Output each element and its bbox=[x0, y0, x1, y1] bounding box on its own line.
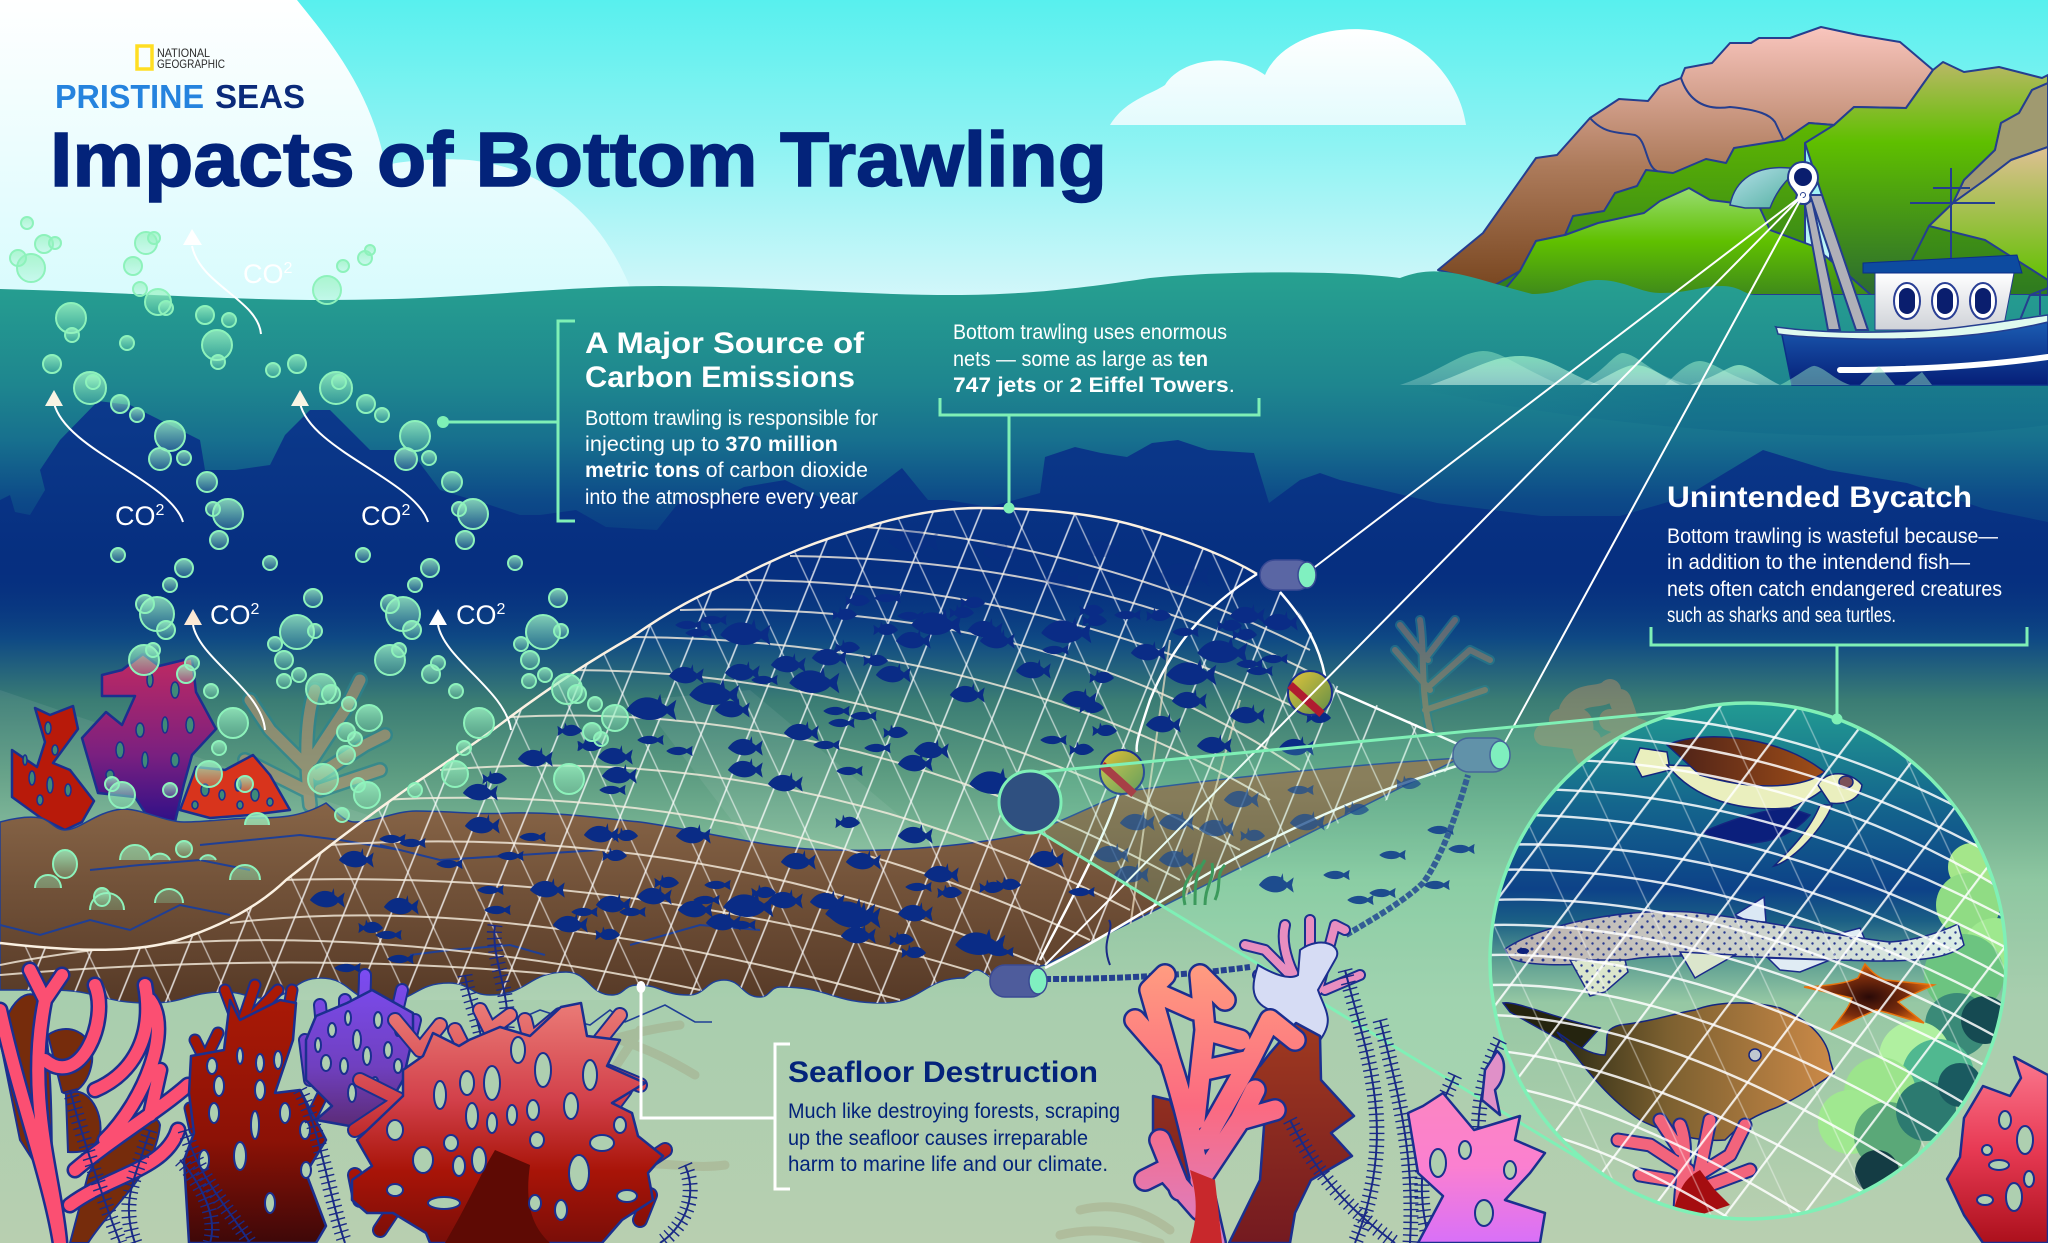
connector dot bbox=[636, 981, 646, 993]
sea bbox=[0, 271, 2048, 1243]
front green hill bbox=[1500, 188, 1871, 295]
body: up the seafloor causes irreparable bbox=[788, 1127, 1088, 1150]
Pristine Seas bbox=[55, 78, 305, 115]
half buried bubbles bbox=[35, 813, 269, 910]
heading bbox=[585, 327, 865, 394]
net mouth arcs bbox=[1040, 574, 1460, 960]
CO2 labels: CO bbox=[361, 501, 402, 531]
background corals right bbox=[1395, 620, 1640, 760]
National Geographic wordmark: GEOGRAPHIC bbox=[157, 57, 225, 71]
distant reef silhouette bbox=[0, 401, 2048, 640]
bubbles rising bbox=[10, 217, 628, 822]
net mesh bbox=[0, 500, 1500, 1010]
light shafts bbox=[0, 690, 1000, 1000]
inset ring bbox=[1490, 703, 2006, 1219]
float right bbox=[1288, 671, 1332, 715]
cabin bbox=[1875, 273, 2014, 330]
CO2 labels: 2 bbox=[402, 502, 410, 519]
shell bbox=[1667, 737, 1825, 786]
inset net mesh bbox=[1490, 700, 2020, 1225]
Pristine Seas: SEAS bbox=[215, 78, 305, 115]
body: such as sharks and sea turtles. bbox=[1667, 604, 1896, 627]
lens circle bbox=[999, 771, 1061, 833]
fish shoal bbox=[310, 526, 1475, 973]
sea surface foam bbox=[1400, 351, 1780, 385]
CO2 labels bbox=[115, 259, 506, 630]
body: into the atmosphere every year bbox=[585, 486, 858, 509]
seafloor wavy lines bbox=[310, 1005, 712, 1035]
pale blue coral bbox=[1253, 943, 1337, 1041]
head bbox=[1818, 774, 1862, 803]
pink coral with brown fronds bbox=[0, 970, 188, 1243]
pulley bbox=[1788, 162, 1818, 204]
crane arms bbox=[1805, 195, 1868, 330]
arrow 5 bbox=[429, 609, 511, 730]
starfish bbox=[1804, 964, 1934, 1030]
mid green hill bbox=[1495, 123, 1834, 295]
callout: seafloor destruction bbox=[636, 981, 1120, 1189]
shark bbox=[1505, 897, 1964, 996]
callout: bycatch bbox=[1651, 481, 2027, 724]
logo bbox=[55, 46, 305, 115]
body: harm to marine life and our climate. bbox=[788, 1153, 1108, 1176]
foreground corals left bbox=[0, 970, 665, 1243]
body: Bottom trawling is responsible for bbox=[585, 407, 878, 430]
CO2 labels: CO bbox=[456, 600, 496, 630]
tan cliff bbox=[1953, 83, 2048, 203]
arrow 4 bbox=[184, 609, 265, 730]
body: injecting up to 370 million bbox=[585, 433, 838, 456]
dark red coral bbox=[184, 985, 326, 1243]
title: Impacts of Bottom Trawling bbox=[50, 117, 1107, 203]
arrow 3 bbox=[183, 229, 261, 334]
salmon coral bbox=[1135, 975, 1295, 1243]
connector dot bbox=[437, 416, 449, 428]
body: in addition to the intendend fish— bbox=[1667, 551, 1970, 574]
connector dot bbox=[1832, 714, 1842, 724]
CO2 labels: CO bbox=[115, 501, 156, 531]
mountain ridges bbox=[1590, 78, 1785, 172]
foreground coral right bbox=[1947, 1057, 2048, 1243]
sandy slope bbox=[1929, 147, 2048, 280]
bottom buoy bbox=[990, 965, 1047, 997]
large red coral bbox=[352, 1003, 665, 1243]
portholes bbox=[1894, 283, 1996, 319]
right buoy bbox=[1453, 738, 1510, 772]
inset circle: bycatch bbox=[1490, 700, 2027, 1225]
hull bbox=[1776, 322, 2048, 385]
seafloor shadows bbox=[576, 1025, 1170, 1243]
stingray bbox=[1503, 1003, 1834, 1140]
body bbox=[1667, 525, 2002, 627]
body: Bottom trawling is wasteful because— bbox=[1667, 525, 1998, 548]
cabin roof bbox=[1863, 255, 2022, 273]
CO2 labels: 2 bbox=[496, 601, 506, 618]
net headline bbox=[0, 508, 1257, 950]
deck trim bbox=[1776, 315, 2048, 339]
seabed bbox=[0, 758, 1460, 1003]
trawl cables bbox=[1045, 195, 1803, 965]
purple coral bbox=[305, 975, 415, 1130]
top buoy bbox=[1260, 560, 1316, 590]
surface band bbox=[1400, 385, 2048, 436]
pink anemone coral bbox=[1245, 920, 1360, 1000]
cloud: upper centre bbox=[1110, 29, 1466, 125]
bracket and connector bbox=[940, 398, 1259, 508]
zoom cone edges bbox=[1040, 705, 1743, 1165]
fishing boat bbox=[1730, 162, 2048, 385]
arrow 1 bbox=[45, 390, 183, 522]
faded tan coral bbox=[245, 680, 385, 805]
National Geographic wordmark bbox=[157, 46, 225, 71]
seaweed left bbox=[70, 1090, 345, 1243]
body bbox=[788, 1100, 1120, 1176]
kelp bbox=[1818, 843, 2004, 1190]
zoom cone from lens to inset bbox=[1040, 703, 1748, 1160]
float left bbox=[1100, 750, 1144, 794]
text: Bottom trawling uses enormous bbox=[953, 321, 1227, 344]
connector dot bbox=[1004, 502, 1014, 514]
seaweed fronds behind foreground bbox=[465, 920, 1110, 1243]
rear flipper bbox=[1634, 748, 1670, 777]
upper faint fish bbox=[888, 526, 1209, 588]
text: 747 jets or 2 Eiffel Towers . bbox=[953, 374, 1235, 397]
lower flipper bbox=[1703, 808, 1810, 843]
bracket and connector bbox=[641, 987, 790, 1189]
sea turtle bbox=[1634, 737, 1862, 866]
Pristine Seas: PRISTINE bbox=[55, 78, 204, 115]
net bundle bbox=[1730, 168, 1800, 208]
heading: Unintended Bycatch bbox=[1667, 481, 1972, 514]
magenta coral bbox=[82, 654, 216, 822]
text: nets — some as large as ten bbox=[953, 348, 1208, 371]
heading: A Major Source of bbox=[585, 327, 865, 360]
magenta coral bbox=[1408, 1051, 1545, 1243]
sea grass bbox=[1184, 860, 1225, 905]
foam over hull bbox=[1780, 366, 1932, 385]
lower net edge bbox=[1045, 762, 1470, 968]
text bbox=[953, 321, 1235, 397]
red coral bbox=[12, 706, 94, 830]
right hillside bbox=[1805, 62, 2048, 295]
bracket and connector bbox=[443, 321, 575, 521]
seaweed centre bbox=[1290, 970, 1500, 1243]
hull stripe bbox=[1840, 357, 2048, 370]
net door buoys bbox=[990, 560, 1510, 997]
trawl net bbox=[0, 500, 1500, 1010]
body bbox=[1667, 765, 1832, 809]
small red coral bbox=[180, 755, 290, 818]
CO2 labels: 2 bbox=[284, 260, 292, 277]
sediment lines bbox=[0, 835, 760, 955]
inset coral bbox=[1618, 1120, 1750, 1215]
National Geographic mark bbox=[137, 46, 152, 69]
cloud: upper left bbox=[0, 0, 635, 300]
CO2 labels: 2 bbox=[250, 601, 260, 618]
CO2 labels: CO bbox=[210, 600, 250, 630]
heading: Seafloor Destruction bbox=[788, 1056, 1098, 1089]
far right slope bbox=[1912, 83, 2048, 295]
foreground corals centre bbox=[1135, 920, 1545, 1243]
body: metric tons of carbon dioxide bbox=[585, 459, 868, 482]
background corals left bbox=[12, 654, 385, 830]
railing bbox=[2020, 288, 2048, 320]
mast bbox=[1910, 168, 1995, 262]
callout: net size bbox=[940, 321, 1259, 514]
mountains and hills bbox=[1438, 27, 2048, 295]
inset water bbox=[1490, 703, 2006, 1219]
heading: Carbon Emissions bbox=[585, 361, 855, 394]
yellow and red floats bbox=[1100, 671, 1332, 794]
arrow 2 bbox=[291, 390, 428, 522]
coral trunk bbox=[445, 1150, 550, 1243]
callout: carbon emissions bbox=[437, 321, 878, 521]
CO2 arrows bbox=[45, 229, 511, 730]
sky background bbox=[0, 0, 2048, 300]
National Geographic wordmark: NATIONAL bbox=[157, 46, 210, 60]
brown mountain bbox=[1438, 27, 1933, 290]
body: nets often catch endangered creatures bbox=[1667, 578, 2002, 601]
bracket and connector bbox=[1651, 627, 2027, 719]
CO2 labels: 2 bbox=[156, 502, 164, 519]
body: Much like destroying forests, scraping bbox=[788, 1100, 1120, 1123]
escaped fish bbox=[1259, 825, 1475, 905]
CO2 labels: CO bbox=[243, 259, 284, 289]
fish over right net bbox=[1094, 776, 1421, 883]
brown coral bbox=[1153, 1023, 1354, 1243]
chain bbox=[1045, 775, 1468, 979]
front flipper bbox=[1774, 805, 1832, 866]
body bbox=[585, 407, 878, 509]
